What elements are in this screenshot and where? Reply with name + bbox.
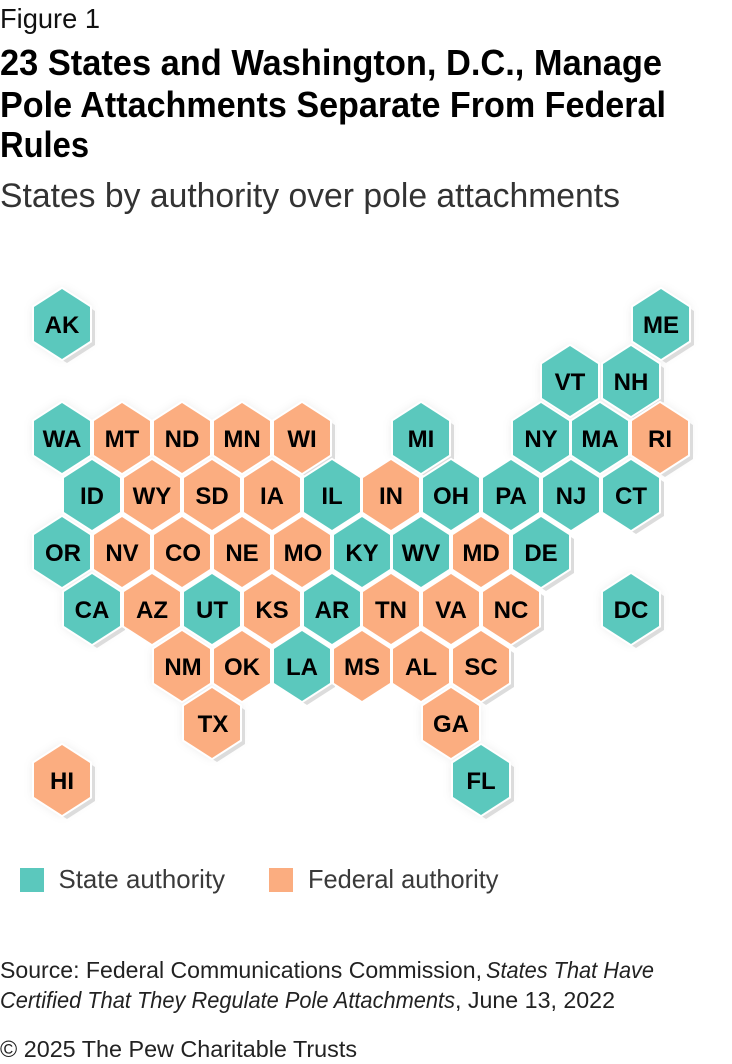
hex: NJ: NJ [556, 483, 586, 510]
hex: HI [34, 745, 90, 815]
hex: MN [214, 403, 270, 473]
hex: CO: CO [165, 540, 201, 567]
source note: States That Have [486, 957, 654, 983]
hex: OH: OH [433, 483, 469, 510]
hex: MN: MN [223, 426, 261, 453]
hex: AR [304, 574, 360, 644]
title: 23 States and Washington, D.C., Manage [0, 42, 662, 83]
title: Pole Attachments Separate From Federal [0, 84, 666, 125]
hex: RI: RI [648, 426, 672, 453]
hex: KY: KY [345, 540, 379, 567]
hex: IL: IL [321, 483, 343, 510]
source note [0, 957, 654, 1013]
hex: MI: MI [408, 426, 434, 453]
hex: WY: WY [133, 483, 171, 510]
hex: LA [274, 631, 330, 701]
hex: SC [453, 631, 509, 701]
hex: DE [513, 517, 569, 587]
hex: ND: ND [165, 426, 199, 453]
legend item: federal authority: Federal authority [308, 864, 498, 894]
hex: OK: OK [224, 654, 261, 681]
hex: ME [633, 289, 689, 359]
hex: WV: WV [402, 540, 440, 567]
hex: ME: ME [643, 312, 679, 339]
hex: ID: ID [80, 483, 104, 510]
hex: OK [214, 631, 270, 701]
hex: WV [393, 517, 449, 587]
hex: IL [304, 460, 360, 530]
hex: NV: NV [105, 540, 139, 567]
source note: Certified That They Regulate Pole Attachments [0, 987, 455, 1013]
hex: CT [603, 460, 659, 530]
hex: TX [184, 688, 240, 758]
hex: PA [483, 460, 539, 530]
hex: FL [453, 745, 509, 815]
hex: MT [94, 403, 150, 473]
hex: AL: AL [405, 654, 437, 681]
hex: DC [603, 574, 659, 644]
hex: NY: NY [524, 426, 558, 453]
hex: ND [154, 403, 210, 473]
hex: WA [34, 403, 90, 473]
hex: MS [334, 631, 390, 701]
hex: AZ: AZ [136, 597, 168, 624]
hex: MO: MO [284, 540, 322, 567]
hex: DE: DE [524, 540, 558, 567]
hexagon map shadows [34, 289, 694, 819]
hex: WA: WA [43, 426, 81, 453]
hex: ID [64, 460, 120, 530]
hex: PA: PA [495, 483, 527, 510]
hex: WY [124, 460, 180, 530]
hex: CO [154, 517, 210, 587]
hex: LA: LA [286, 654, 318, 681]
hex: KS: KS [255, 597, 289, 624]
hex: OR: OR [45, 540, 81, 567]
hex: DC: DC [614, 597, 648, 624]
hex: KS [244, 574, 300, 644]
hex: FL: FL [466, 768, 496, 795]
subtitle: States by authority over pole attachments [0, 177, 620, 215]
copyright: © 2025 The Pew Charitable Trusts [0, 1036, 357, 1062]
hex: IA [244, 460, 300, 530]
hex: OH [423, 460, 479, 530]
hex: UT [184, 574, 240, 644]
hex: TN [363, 574, 419, 644]
hex: MI [393, 403, 449, 473]
hex: NY [513, 403, 569, 473]
hex: TN: TN [375, 597, 407, 624]
hex: AK [34, 289, 90, 359]
hex: AZ [124, 574, 180, 644]
legend [20, 864, 498, 894]
hex: RI [632, 403, 688, 473]
hex: NH: NH [614, 369, 648, 396]
hex: GA [423, 688, 479, 758]
hex: VA: VA [435, 597, 467, 624]
hex: VA [423, 574, 479, 644]
hex: WI: WI [287, 426, 317, 453]
hex: OR [34, 517, 90, 587]
hex: MD [453, 517, 509, 587]
hex: MA [572, 403, 628, 473]
hex: GA: GA [433, 711, 469, 738]
legend item: state authority: State authority [58, 864, 225, 894]
hex: MA: MA [581, 426, 619, 453]
hex: AL [393, 631, 449, 701]
hex: NM: NM [164, 654, 202, 681]
hex: SD [184, 460, 240, 530]
hex: HI: HI [50, 768, 74, 795]
title: Rules [0, 124, 89, 165]
hex: NM [154, 631, 210, 701]
hex: NJ [543, 460, 599, 530]
hex: SD: SD [195, 483, 229, 510]
hex: IN [363, 460, 419, 530]
hexagon tile map [34, 289, 689, 815]
hex: AK: AK [45, 312, 80, 339]
hex: VT [542, 346, 598, 416]
hex: NE: NE [225, 540, 259, 567]
hex: VT: VT [555, 369, 586, 396]
hex: NV [94, 517, 150, 587]
hex: TX: TX [198, 711, 228, 738]
hex: AR: AR [315, 597, 349, 624]
hex: NE [214, 517, 270, 587]
source note: , June 13, 2022 [455, 987, 615, 1013]
hex: IN: IN [379, 483, 403, 510]
hex: WI [274, 403, 330, 473]
hex: MS: MS [344, 654, 380, 681]
hex: CT: CT [615, 483, 647, 510]
hex: CA [64, 574, 120, 644]
hex: NC: NC [494, 597, 528, 624]
hex: UT: UT [196, 597, 228, 624]
hex: MO [274, 517, 330, 587]
hex: NH [603, 346, 659, 416]
hex: MT: MT [105, 426, 140, 453]
source note: Source: Federal Communications Commission, [0, 957, 482, 983]
hex: SC: SC [464, 654, 498, 681]
hex: MD: MD [462, 540, 500, 567]
hex: KY [334, 517, 390, 587]
hex: NC [483, 574, 539, 644]
figure label: Figure 1 [0, 3, 100, 34]
hex: IA: IA [260, 483, 284, 510]
hex: CA: CA [75, 597, 109, 624]
title [0, 42, 666, 165]
